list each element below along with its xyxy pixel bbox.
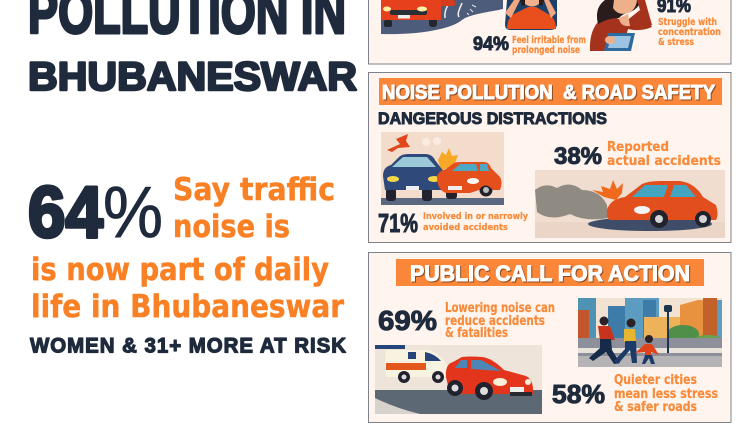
panel: health effects <box>368 0 731 64</box>
statistic text: noise is <box>173 209 290 245</box>
stat: 58% <box>552 372 718 415</box>
stat: 91%: concentration <box>658 27 721 38</box>
stat: 38%: 38% <box>554 143 602 170</box>
stat: 91% <box>657 0 721 48</box>
risk subheading: WOMEN & 31+ MORE AT RISK <box>30 334 347 358</box>
panel: noise pollution and road safety <box>368 72 731 242</box>
heading banner: PUBLIC CALL FOR ACTION <box>410 261 690 286</box>
statistic text: life in Bhubaneswar <box>31 289 345 325</box>
stat: 58%: & safer roads <box>614 399 697 415</box>
heading banner: PUBLIC CALL FOR ACTION <box>411 262 691 287</box>
stat: 69%: & fatalities <box>445 326 508 341</box>
stat: 69% <box>378 301 555 341</box>
stat: 91%: & stress <box>658 37 694 48</box>
image: crashed car with smoke <box>535 170 725 238</box>
image: two cars colliding <box>381 132 504 205</box>
stat: 71% <box>378 208 528 238</box>
stat: 91%: Struggle with <box>658 17 717 28</box>
stat: 71%: 71% <box>378 208 418 238</box>
stat: 94% <box>473 34 586 56</box>
statistic text <box>31 172 345 325</box>
image: pedestrians in city <box>578 298 722 367</box>
stat: 69%: reduce accidents <box>445 314 545 329</box>
stat: 69%: 69% <box>378 305 437 336</box>
stat: 58%: mean less stress <box>614 386 718 402</box>
stat: 58%: Quieter cities <box>614 372 697 388</box>
icon: girl with tablet <box>590 0 652 51</box>
subheading: DANGEROUS DISTRACTIONS <box>378 109 607 128</box>
title: BHUBANESWAR <box>28 55 357 99</box>
stat: 94%: Feel irritable from <box>512 35 586 46</box>
stat: 38%: actual accidents <box>607 153 721 169</box>
stat: 71%: avoided accidents <box>423 223 508 233</box>
heading banner: NOISE POLLUTION & ROAD SAFETY <box>383 83 717 105</box>
stat: 69%: Lowering noise can <box>445 301 555 316</box>
icon: red car on road <box>381 0 503 34</box>
statistic text: is now part of daily <box>31 252 329 288</box>
panel: public call for action <box>368 252 731 422</box>
stat: 38%: Reported <box>607 139 669 155</box>
image: ambulance and red car <box>375 345 542 414</box>
title <box>28 0 357 99</box>
heading banner: NOISE POLLUTION & ROAD SAFETY <box>382 82 716 104</box>
stat: 94%: prolonged noise <box>512 45 580 56</box>
stat: 94%: 94% <box>473 34 509 55</box>
icon: woman covering ears <box>505 0 557 30</box>
statistic text: Say traffic <box>173 172 335 208</box>
stat: 38% <box>554 139 721 170</box>
stat: 71%: Involved in or narrowly <box>423 212 528 222</box>
key statistic: 64%: 64% <box>28 173 163 253</box>
stat: 58%: 58% <box>552 379 605 409</box>
